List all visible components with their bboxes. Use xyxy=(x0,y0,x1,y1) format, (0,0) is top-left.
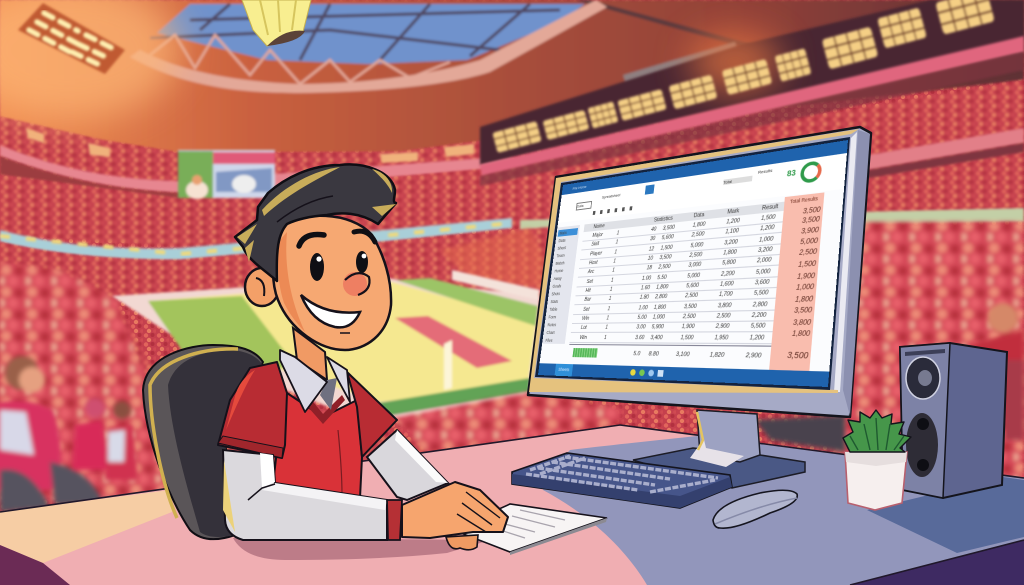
totals row: 1,820 xyxy=(709,352,725,359)
results column values: 1,800 xyxy=(792,331,810,338)
desk shadow under man xyxy=(233,538,490,560)
totals row: 8.80 xyxy=(648,351,659,358)
spreadsheet rows: 5,000 xyxy=(690,241,703,249)
spreadsheet rows: 1.00 xyxy=(638,304,648,311)
foreground spectators xyxy=(392,392,622,453)
hanging lantern xyxy=(242,0,311,46)
totals row: 3,100 xyxy=(676,351,690,358)
spreadsheet rows: 3,500 xyxy=(662,224,675,231)
spreadsheet rows: 1,950 xyxy=(714,334,728,341)
results column heading: Total Results xyxy=(790,195,818,204)
spreadsheet rows: Arc xyxy=(588,268,594,275)
spreadsheet rows: 2,800 xyxy=(752,301,768,308)
ear xyxy=(245,268,279,306)
spreadsheet rows: 3,400 xyxy=(650,334,663,341)
monitor stand xyxy=(633,410,805,488)
spreadsheet rows: 1.00 xyxy=(642,275,651,282)
totals row: 2,900 xyxy=(745,352,762,360)
results column values: 3,500 xyxy=(787,352,808,361)
table header: Result xyxy=(762,203,778,212)
taskbar xyxy=(538,363,829,387)
spreadsheet rows: 1,200 xyxy=(760,224,775,232)
man xyxy=(218,164,607,555)
spreadsheet rows: 1 xyxy=(604,334,607,341)
spreadsheet rows: 1 xyxy=(607,306,610,312)
spreadsheet rows: Set xyxy=(583,306,590,312)
results column values: 1,000 xyxy=(796,284,814,292)
monitor frame xyxy=(528,127,871,417)
spreadsheet rows: 1,200 xyxy=(726,217,740,225)
spreadsheet rows: 3,800 xyxy=(717,302,732,309)
spreadsheet rows: 3,000 xyxy=(688,261,701,268)
spreadsheet rows: 2,500 xyxy=(716,312,731,319)
spreadsheet rows: 1 xyxy=(611,277,614,283)
spreadsheet rows: 1,800 xyxy=(654,304,666,311)
spreadsheet rows: 2,500 xyxy=(658,263,671,270)
toolbar: Results xyxy=(758,167,773,175)
big screen xyxy=(178,150,275,199)
torso and sweater xyxy=(218,362,397,498)
spreadsheet rows: 5,800 xyxy=(722,259,736,266)
spreadsheet rows: 2,500 xyxy=(685,292,698,299)
taskbar: Sheets xyxy=(558,367,570,372)
top-left floodlight xyxy=(0,0,180,120)
spreadsheet rows: 5,600 xyxy=(686,282,699,289)
results column values: 3,500 xyxy=(802,216,820,225)
results column values: 3,800 xyxy=(793,320,811,327)
spreadsheet rows: 1,600 xyxy=(720,280,734,288)
spreadsheet rows: Host xyxy=(589,259,598,266)
spreadsheet rows: 1 xyxy=(612,267,615,273)
green progress bar xyxy=(572,348,598,358)
speaker xyxy=(900,343,1007,498)
table header: Data xyxy=(693,212,705,219)
spreadsheet rows: 3.00 xyxy=(636,324,646,330)
spreadsheet rows: 1,500 xyxy=(680,334,694,341)
pink results column xyxy=(769,192,824,371)
results column values: 5,000 xyxy=(800,238,818,247)
spreadsheet rows: 1,800 xyxy=(692,221,706,229)
results column values: 1,900 xyxy=(797,273,815,281)
spreadsheet rows: 10 xyxy=(647,255,653,262)
spreadsheet rows: 5,500 xyxy=(754,289,769,297)
results column values: 3,900 xyxy=(801,227,819,236)
totals row xyxy=(567,344,771,367)
spreadsheet rows: 12 xyxy=(649,246,654,252)
toolbar: 83 xyxy=(787,170,796,179)
spreadsheet rows: 3.60 xyxy=(635,334,645,341)
spreadsheet rows: 5,900 xyxy=(651,323,664,330)
spreadsheet rows: Hit xyxy=(585,287,591,293)
spreadsheet rows: 1,200 xyxy=(749,334,764,341)
collar xyxy=(280,350,350,412)
spreadsheet rows: Win xyxy=(579,334,587,341)
sidebar: Main Data Sheet Team Match Home Away Goals Shots Stats Table Form Notes Chart Files xyxy=(545,230,567,343)
pitch xyxy=(112,270,540,424)
spreadsheet rows: 1,800 xyxy=(656,283,669,290)
desk xyxy=(0,425,1024,585)
chair xyxy=(143,345,263,539)
hand xyxy=(402,482,508,550)
toolbar xyxy=(558,153,847,223)
results column values: 1,800 xyxy=(795,296,813,304)
spreadsheet rows: 2,800 xyxy=(655,293,667,300)
eyes and brows xyxy=(299,231,375,281)
spreadsheet rows xyxy=(570,213,783,344)
spreadsheet rows: 1.60 xyxy=(641,284,650,291)
results column values: 3,500 xyxy=(794,307,812,315)
spreadsheet rows: 3,200 xyxy=(758,246,773,254)
spreadsheet rows: 1,500 xyxy=(761,213,776,222)
upper crowd xyxy=(0,117,490,190)
blue perimeter band xyxy=(0,218,512,260)
spreadsheet rows: 5,600 xyxy=(661,233,674,241)
spreadsheet rows: 2,900 xyxy=(715,323,730,330)
lower crowd xyxy=(0,226,560,480)
spreadsheet rows: 1 xyxy=(613,258,616,264)
spreadsheet rows: Set xyxy=(586,278,593,285)
spreadsheet rows: 2,500 xyxy=(683,313,696,320)
neck xyxy=(293,328,327,380)
mouse xyxy=(713,490,797,528)
spreadsheet rows: Bar xyxy=(584,296,591,302)
spreadsheet rows: Win xyxy=(582,315,590,321)
spreadsheet rows: 5,500 xyxy=(750,322,766,329)
results column values: 3,500 xyxy=(802,207,821,216)
overhead light gantry xyxy=(480,0,1024,186)
keyboard xyxy=(512,453,732,508)
spreadsheet rows: Player xyxy=(590,250,602,257)
spreadsheet rows: 40 xyxy=(651,226,657,233)
totals row: 5.0 xyxy=(633,351,641,357)
spreadsheet rows: 1 xyxy=(614,249,617,255)
left arm white sleeve xyxy=(223,450,402,540)
spreadsheet rows: 1,100 xyxy=(725,227,739,235)
table header: Mark xyxy=(727,208,740,216)
right arm white sleeve xyxy=(367,430,448,500)
spreadsheet rows: 1,700 xyxy=(719,290,733,298)
table header xyxy=(584,202,784,232)
spreadsheet rows: 2,200 xyxy=(751,311,767,319)
spreadsheet rows: 5,000 xyxy=(687,272,700,279)
sidebar xyxy=(542,225,580,344)
results column values: 2,500 xyxy=(799,249,817,257)
hair xyxy=(235,164,396,281)
face xyxy=(273,216,391,350)
spreadsheet rows: 5,000 xyxy=(756,268,771,276)
upper crowd tier xyxy=(0,80,1024,247)
spreadsheet rows: 1 xyxy=(615,239,618,245)
left pink stadium tier stripe xyxy=(0,145,512,193)
spreadsheet rows: 2,500 xyxy=(691,231,705,238)
title bar: File Home xyxy=(572,184,587,191)
toolbar: Spreadsheet xyxy=(602,192,621,200)
nose xyxy=(343,272,370,296)
table header: Statistics xyxy=(654,215,673,224)
spreadsheet rows: 5.00 xyxy=(637,314,647,321)
spreadsheet rows: 1 xyxy=(616,230,620,236)
spreadsheet rows: 5.50 xyxy=(657,274,667,281)
smile xyxy=(301,295,360,333)
spreadsheet rows: 2,000 xyxy=(757,256,772,264)
potted plant xyxy=(843,410,911,510)
spreadsheet rows: 30 xyxy=(650,235,656,242)
spreadsheet rows: 3,200 xyxy=(724,238,738,246)
spreadsheet rows: 1 xyxy=(608,295,612,302)
roof xyxy=(0,0,1024,153)
toolbar: Data xyxy=(577,203,584,209)
results column values: 1,500 xyxy=(798,261,816,269)
spreadsheet rows: 2,200 xyxy=(721,270,735,277)
spreadsheet rows: 18 xyxy=(646,264,652,271)
spreadsheet rows: Major xyxy=(592,232,603,238)
spreadsheet rows: 3,500 xyxy=(659,254,672,261)
spreadsheet rows: 2,500 xyxy=(689,251,702,259)
papers xyxy=(453,504,607,555)
spreadsheet rows: 1,900 xyxy=(681,323,695,330)
spreadsheet rows: Skill xyxy=(591,241,599,247)
monitor screen: spreadsheet xyxy=(538,140,848,387)
spreadsheet rows: 3,500 xyxy=(684,303,697,310)
title bar xyxy=(562,140,848,195)
spreadsheet rows: 1,500 xyxy=(660,244,673,251)
spreadsheet rows: 1 xyxy=(610,286,613,292)
spreadsheet rows: 1,000 xyxy=(759,235,774,243)
spreadsheet rows: 1 xyxy=(606,315,609,321)
spreadsheet rows: 1,800 xyxy=(723,248,737,256)
table header: Name xyxy=(593,223,605,230)
spreadsheet rows: 1.80 xyxy=(639,294,649,300)
spreadsheet rows: 1,000 xyxy=(652,314,665,320)
spreadsheet rows: 3,600 xyxy=(755,278,770,286)
results column values xyxy=(787,206,821,361)
spreadsheet rows: Lot xyxy=(581,324,587,330)
toolbar: Total xyxy=(723,179,732,185)
spreadsheet rows: 1 xyxy=(605,324,608,330)
